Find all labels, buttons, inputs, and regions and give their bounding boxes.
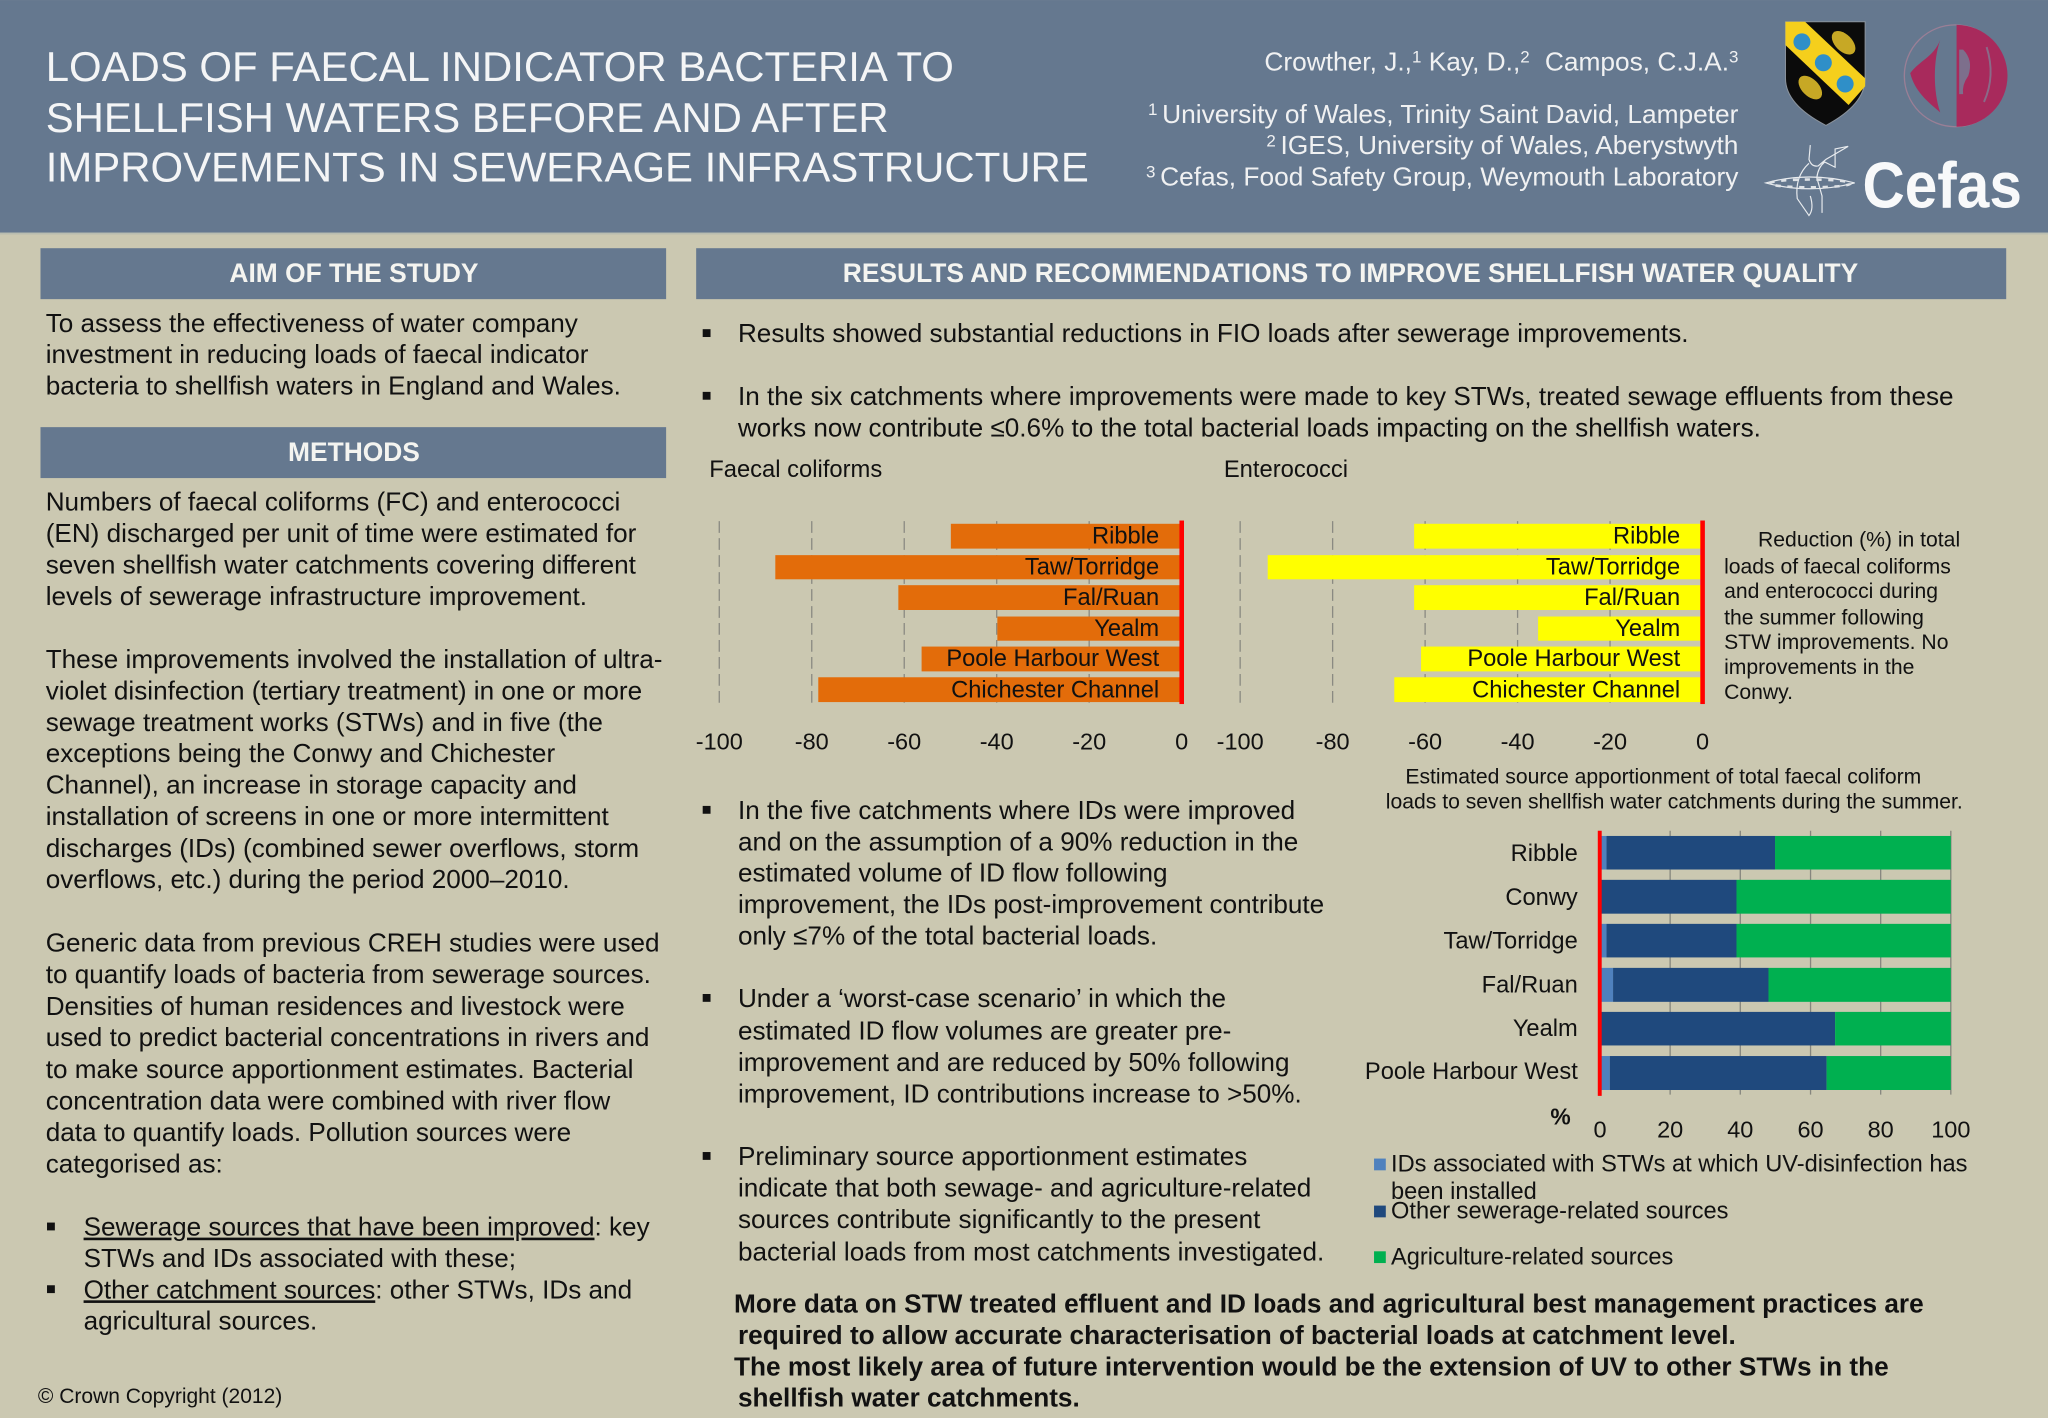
caption: source apportionment bbox=[1386, 766, 1963, 814]
list: pollution sources: STWs and IDs associated with these; bbox=[84, 1243, 516, 1273]
chart: enterococci reduction: -20 bbox=[1593, 729, 1627, 755]
results bullets top bbox=[703, 318, 1954, 442]
results bullets top: In the six catchments where improvements were made to key STWs, treated sewage effluents from these bbox=[738, 381, 1954, 411]
chart: faecal coliforms reduction: Yealm bbox=[1094, 616, 1159, 642]
authors: 2 bbox=[1520, 48, 1530, 67]
affiliations: 1 bbox=[1148, 100, 1162, 119]
caption: source apportionment: loads to seven shellfish water catchments during the summer. bbox=[1386, 791, 1963, 814]
title: LOADS OF FAECAL INDICATOR BACTERIA TO bbox=[46, 43, 954, 90]
results bullets middle: and on the assumption of a 90% reduction in the bbox=[738, 826, 1298, 856]
affiliations: Cefas, Food Safety Group, Weymouth Laboratory bbox=[1160, 162, 1739, 192]
icon: round crest logo bbox=[1904, 25, 2008, 127]
caption: reduction: loads of faecal coliforms bbox=[1724, 555, 1951, 578]
heading: results: RESULTS AND RECOMMENDATIONS TO IMPROVE SHELLFISH WATER QUALITY bbox=[843, 258, 1859, 288]
text block: methods bbox=[46, 487, 662, 1178]
chart: enterococci reduction: Fal/Ruan bbox=[1584, 585, 1680, 611]
chart: source apportionment: Fal/Ruan bbox=[1482, 973, 1578, 999]
chart: enterococci reduction bbox=[1217, 456, 1709, 755]
results bullets middle bbox=[703, 795, 1324, 1266]
chart: faecal coliforms reduction: -20 bbox=[1072, 729, 1106, 755]
chart: faecal coliforms reduction: Taw/Torridge bbox=[1025, 555, 1159, 581]
recommendations bbox=[734, 1289, 1924, 1413]
chart: enterococci reduction: Yealm bbox=[1615, 616, 1680, 642]
chart: source apportionment: 40 bbox=[1727, 1117, 1753, 1143]
caption: source apportionment: Estimated source apportionment of total faecal coliform bbox=[1405, 766, 1921, 789]
text block: methods: Channel), an increase in storage capacity and bbox=[46, 770, 577, 800]
results bullets middle: improvement, the IDs post-improvement contribute bbox=[738, 889, 1324, 919]
chart: source apportionment: Poole Harbour West bbox=[1365, 1059, 1578, 1085]
icon: university shield bbox=[1785, 22, 1865, 125]
authors: 1 bbox=[1412, 48, 1421, 67]
row: Fal/Ruan bbox=[1600, 968, 1951, 1002]
text block: aim: bacteria to shellfish waters in England and Wales. bbox=[46, 370, 621, 400]
text block: methods: installation of screens in one or more intermittent bbox=[46, 801, 610, 831]
chart: enterococci reduction: Taw/Torridge bbox=[1546, 555, 1680, 581]
row: Yealm bbox=[1600, 1012, 1951, 1045]
row: Poole Harbour West bbox=[1600, 1056, 1951, 1090]
chart: enterococci reduction: -60 bbox=[1408, 729, 1442, 755]
chart: source apportionment: % bbox=[1550, 1104, 1571, 1130]
affiliations: 2 bbox=[1266, 131, 1281, 150]
chart: source apportionment bbox=[1365, 831, 1970, 1143]
text block: methods: seven shellfish water catchments covering different bbox=[46, 549, 637, 579]
copyright: © Crown Copyright (2012) bbox=[38, 1385, 282, 1408]
text block: aim bbox=[46, 308, 621, 400]
results bullets top: Results showed substantial reductions in FIO loads after sewerage improvements. bbox=[738, 318, 1689, 348]
recommendations: More data on STW treated effluent and ID loads and agricultural best management practices are bbox=[734, 1289, 1924, 1319]
authors: Campos, C.J.A. bbox=[1538, 47, 1729, 77]
text block: methods: These improvements involved the installation of ultra- bbox=[46, 644, 662, 674]
text block: methods: concentration data were combined with river flow bbox=[46, 1086, 610, 1116]
text block: methods: sewage treatment works (STWs) and in five (the bbox=[46, 707, 603, 737]
text block: methods: Numbers of faecal coliforms (FC) and enterococci bbox=[46, 487, 620, 517]
chart: enterococci reduction: -100 bbox=[1217, 729, 1264, 755]
chart: faecal coliforms reduction: -80 bbox=[795, 729, 829, 755]
chart: source apportionment: Ribble bbox=[1511, 841, 1578, 867]
results bullets middle: Under a ‘worst-case scenario’ in which the bbox=[738, 983, 1226, 1013]
chart: faecal coliforms reduction bbox=[696, 456, 1188, 755]
legend: Other sewerage-related sources bbox=[1391, 1199, 1729, 1225]
chart: enterococci reduction: Poole Harbour West bbox=[1467, 646, 1681, 672]
chart: source apportionment: Taw/Torridge bbox=[1444, 928, 1578, 954]
title: IMPROVEMENTS IN SEWERAGE INFRASTRUCTURE bbox=[46, 144, 1089, 191]
heading: methods: METHODS bbox=[288, 437, 420, 467]
chart: faecal coliforms reduction: Ribble bbox=[1092, 523, 1159, 549]
results bullets middle: Preliminary source apportionment estimates bbox=[738, 1141, 1247, 1171]
legend: Agriculture-related sources bbox=[1391, 1244, 1673, 1270]
chart: faecal coliforms reduction: -100 bbox=[696, 729, 743, 755]
text block: methods: to quantify loads of bacteria from sewerage sources. bbox=[46, 959, 651, 989]
results bullets middle: bacterial loads from most catchments investigated. bbox=[738, 1236, 1324, 1266]
text block: methods: levels of sewerage infrastructure improvement. bbox=[46, 581, 587, 611]
caption: reduction: STW improvements. No bbox=[1724, 631, 1948, 654]
text block: methods: violet disinfection (tertiary treatment) in one or more bbox=[46, 675, 642, 705]
results bullets middle: estimated ID flow volumes are greater pre- bbox=[738, 1016, 1231, 1046]
affiliations: IGES, University of Wales, Aberystwyth bbox=[1281, 130, 1738, 160]
row: Taw/Torridge bbox=[1600, 924, 1951, 957]
list: pollution sources: Other catchment sources: other STWs, IDs and bbox=[84, 1274, 632, 1304]
heading: methods bbox=[40, 427, 666, 478]
list: pollution sources bbox=[47, 1212, 650, 1336]
caption: reduction: Conwy. bbox=[1724, 681, 1793, 704]
text block: methods: discharges (IDs) (combined sewer overflows, storm bbox=[46, 833, 639, 863]
chart: enterococci reduction: Enterococci bbox=[1224, 456, 1348, 483]
chart: source apportionment: 60 bbox=[1797, 1117, 1824, 1143]
chart: source apportionment: 20 bbox=[1657, 1117, 1683, 1143]
chart: enterococci reduction: Chichester Channel bbox=[1472, 678, 1680, 704]
caption: reduction bbox=[1724, 529, 1960, 704]
results bullets middle: only ≤7% of the total bacterial loads. bbox=[738, 920, 1157, 950]
legend: IDs associated with STWs at which UV-disinfection has bbox=[1391, 1152, 1967, 1178]
results bullets middle: improvement, ID contributions increase to >50%. bbox=[738, 1078, 1302, 1108]
chart: enterococci reduction: -40 bbox=[1501, 729, 1535, 755]
text block: methods: used to predict bacterial concentrations in rivers and bbox=[46, 1022, 649, 1052]
caption: reduction: and enterococci during bbox=[1724, 580, 1938, 603]
caption: reduction: the summer following bbox=[1724, 606, 1924, 629]
text block: methods: overflows, etc.) during the period 2000–2010. bbox=[46, 864, 570, 894]
chart: enterococci reduction: -80 bbox=[1316, 729, 1350, 755]
text block: methods: Densities of human residences and livestock were bbox=[46, 991, 625, 1021]
results bullets middle: sources contribute significantly to the present bbox=[738, 1204, 1261, 1234]
chart: source apportionment: 0 bbox=[1593, 1117, 1607, 1143]
text block: aim: To assess the effectiveness of water company bbox=[46, 308, 578, 338]
results bullets top: works now contribute ≤0.6% to the total bacterial loads impacting on the shellfish waters. bbox=[737, 412, 1761, 442]
results bullets middle: estimated volume of ID flow following bbox=[738, 858, 1168, 888]
recommendations: required to allow accurate characterisation of bacterial loads at catchment level. bbox=[738, 1320, 1736, 1350]
chart: faecal coliforms reduction: Chichester Channel bbox=[951, 678, 1159, 704]
chart: faecal coliforms reduction: -60 bbox=[887, 729, 921, 755]
row: Conwy bbox=[1600, 880, 1951, 914]
text block: methods: (EN) discharged per unit of time were estimated for bbox=[46, 518, 637, 548]
affiliations: 3 bbox=[1146, 163, 1160, 182]
heading: aim of the study: AIM OF THE STUDY bbox=[229, 258, 479, 288]
legend bbox=[1374, 1152, 1967, 1270]
results bullets middle: improvement and are reduced by 50% following bbox=[738, 1047, 1289, 1077]
authors: 3 bbox=[1729, 48, 1738, 67]
chart: source apportionment: 100 bbox=[1931, 1117, 1970, 1143]
chart: faecal coliforms reduction: Fal/Ruan bbox=[1063, 585, 1159, 611]
chart: source apportionment: Conwy bbox=[1505, 885, 1578, 911]
chart: faecal coliforms reduction: Poole Harbour West bbox=[946, 646, 1160, 672]
text block: methods: data to quantify loads. Pollution sources were bbox=[46, 1117, 571, 1147]
affiliations: University of Wales, Trinity Saint David, Lampeter bbox=[1162, 99, 1739, 129]
chart: source apportionment: Yealm bbox=[1513, 1016, 1578, 1042]
row: Ribble bbox=[1600, 836, 1951, 870]
results bullets middle: indicate that both sewage- and agriculture-related bbox=[738, 1172, 1311, 1202]
title: SHELLFISH WATERS BEFORE AND AFTER bbox=[46, 94, 889, 141]
icon: Cefas logo: Cefas bbox=[1863, 149, 2022, 222]
legend: been installed bbox=[1391, 1179, 1537, 1205]
recommendations: The most likely area of future intervention would be the extension of UV to other STWs in the bbox=[734, 1351, 1889, 1381]
chart: faecal coliforms reduction: 0 bbox=[1175, 729, 1188, 755]
heading: results bbox=[696, 248, 2006, 299]
heading: aim of the study bbox=[40, 248, 666, 299]
chart: enterococci reduction: 0 bbox=[1696, 729, 1709, 755]
chart: source apportionment: 80 bbox=[1868, 1117, 1894, 1143]
text block: methods: to make source apportionment estimates. Bacterial bbox=[46, 1054, 633, 1084]
text block: methods: Generic data from previous CREH studies were used bbox=[46, 928, 660, 958]
affiliations bbox=[1146, 99, 1739, 192]
authors: Crowther, J., bbox=[1264, 47, 1412, 77]
list: pollution sources: Sewerage sources that have been improved: key bbox=[84, 1212, 650, 1242]
results bullets middle: In the five catchments where IDs were improved bbox=[738, 795, 1295, 825]
chart: enterococci reduction: Ribble bbox=[1613, 523, 1680, 549]
text block: methods: exceptions being the Conwy and Chichester bbox=[46, 738, 555, 768]
text block: methods: categorised as: bbox=[46, 1148, 223, 1178]
title bbox=[46, 43, 1089, 191]
list: pollution sources: agricultural sources. bbox=[84, 1306, 317, 1336]
authors: Kay, D., bbox=[1421, 47, 1520, 77]
caption: reduction: improvements in the bbox=[1724, 656, 1914, 679]
header band bbox=[0, 0, 2048, 234]
caption: reduction: Reduction (%) in total bbox=[1758, 529, 1960, 552]
chart: faecal coliforms reduction: -40 bbox=[980, 729, 1014, 755]
icon: Cefas logo bbox=[1766, 145, 2022, 222]
text block: aim: investment in reducing loads of faecal indicator bbox=[46, 339, 589, 369]
chart: faecal coliforms reduction: Faecal coliforms bbox=[709, 456, 882, 483]
recommendations: shellfish water catchments. bbox=[738, 1383, 1080, 1413]
